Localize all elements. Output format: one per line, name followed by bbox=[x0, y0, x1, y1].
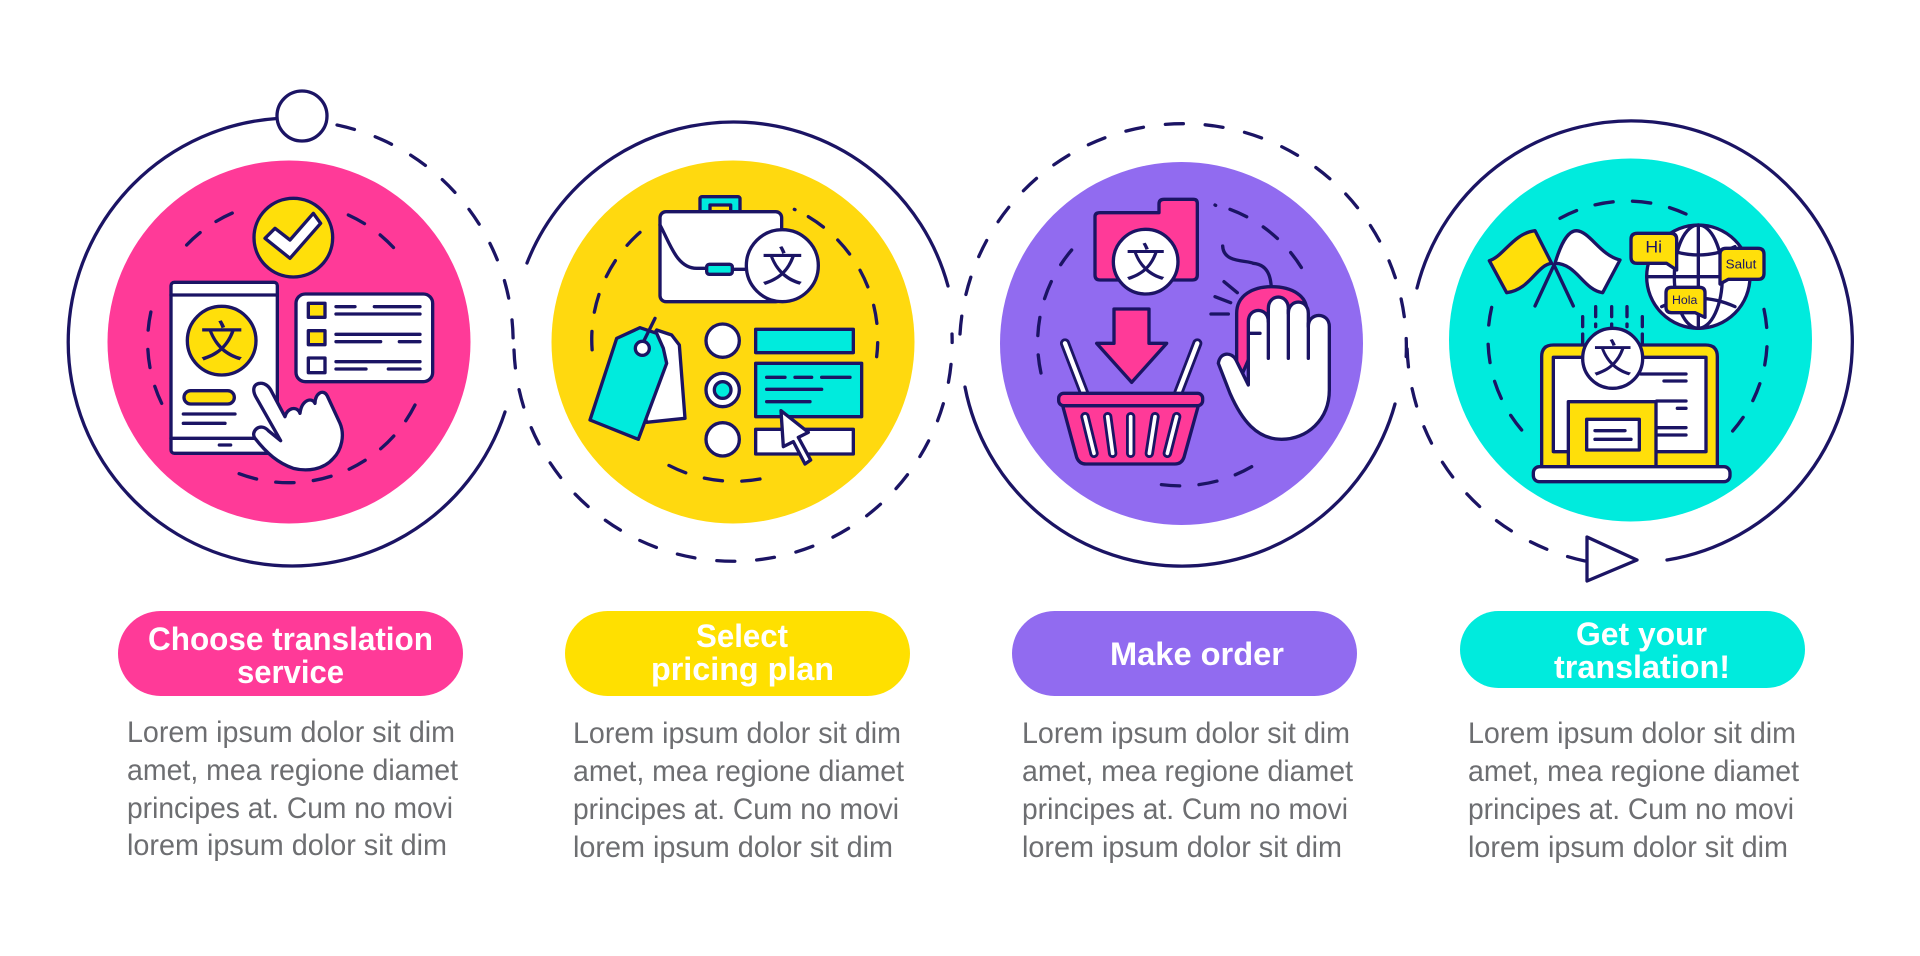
step 1 description: lorem ipsum dolor sit dim bbox=[127, 829, 447, 862]
step 2 description: amet, mea regione diamet bbox=[573, 755, 905, 788]
pill bbox=[565, 611, 910, 696]
step 4 label bbox=[1460, 611, 1805, 688]
icon: translation badge: 文 bbox=[1593, 338, 1632, 382]
icon: translation badge bbox=[1583, 328, 1643, 388]
step 3 description: lorem ipsum dolor sit dim bbox=[1022, 831, 1342, 864]
pill bbox=[118, 611, 463, 696]
flow line: solid arcs bbox=[68, 118, 1852, 566]
step 2 description: Lorem ipsum dolor sit dim bbox=[573, 717, 901, 750]
icon: speech bubble Salut bbox=[1720, 248, 1764, 284]
icon: speech bubble Hola: Hola bbox=[1672, 294, 1698, 307]
panel: step 4 circle and icons bbox=[1449, 158, 1812, 522]
heading: pricing plan bbox=[651, 651, 834, 687]
icon: mouse bbox=[1211, 246, 1307, 387]
teal circle bbox=[1449, 158, 1812, 522]
step 3 description: amet, mea regione diamet bbox=[1022, 755, 1354, 788]
icon: briefcase: 文 bbox=[762, 243, 803, 290]
flow line: dashed connector bbox=[337, 124, 1585, 561]
step 4 description: lorem ipsum dolor sit dim bbox=[1468, 831, 1788, 864]
heading: translation! bbox=[1554, 649, 1730, 685]
icon: speech bubble Salut: Salut bbox=[1726, 257, 1757, 271]
icon: price tags bbox=[590, 318, 685, 439]
heading: Choose translation bbox=[148, 621, 433, 657]
step 2 description: lorem ipsum dolor sit dim bbox=[573, 831, 893, 864]
icon: pricing blocks bbox=[756, 329, 862, 454]
icon: radio options bbox=[706, 324, 739, 456]
icon: briefcase, price tags and pricing options bbox=[590, 197, 878, 481]
pill bbox=[1012, 611, 1357, 696]
heading: Select bbox=[696, 618, 788, 654]
icon: hand bbox=[1218, 297, 1329, 439]
icon: folder, basket and hand on mouse bbox=[1038, 199, 1329, 486]
step 2 description: principes at. Cum no movi bbox=[573, 793, 899, 826]
icon: end arrow bbox=[1587, 537, 1637, 581]
icon: crossed flags bbox=[1489, 231, 1620, 306]
icon: speech bubble Hi bbox=[1631, 233, 1677, 270]
heading: Make order bbox=[1110, 636, 1284, 672]
step 3 description: principes at. Cum no movi bbox=[1022, 793, 1348, 826]
heading: service bbox=[237, 654, 344, 690]
icon: folder: 文 bbox=[1126, 242, 1166, 286]
icon: phone bbox=[171, 282, 277, 453]
pink circle bbox=[108, 160, 470, 524]
panel: step 1 circle and icons bbox=[108, 160, 470, 524]
icon: pointing hand bbox=[254, 383, 342, 470]
step 3 label bbox=[1012, 611, 1357, 696]
step 4 description: principes at. Cum no movi bbox=[1468, 793, 1794, 826]
icon: globe bbox=[1647, 225, 1750, 328]
icon: cursor bbox=[781, 411, 811, 464]
icon: basket bbox=[1059, 343, 1203, 464]
icon: speech bubble Hi: Hi bbox=[1645, 238, 1662, 257]
panel: step 2 circle and icons bbox=[552, 160, 914, 524]
icon: folder bbox=[1095, 199, 1197, 294]
icon: speech bubble Hola bbox=[1666, 287, 1705, 317]
icon: laptop bbox=[1533, 307, 1730, 482]
step 1 label bbox=[118, 611, 463, 696]
pill bbox=[1460, 611, 1805, 688]
step 3 description: Lorem ipsum dolor sit dim bbox=[1022, 717, 1350, 750]
icon: flags, globe and laptop bbox=[1488, 201, 1767, 482]
purple circle bbox=[1000, 162, 1363, 525]
icon: checklist card bbox=[296, 294, 433, 382]
step 1 description: Lorem ipsum dolor sit dim bbox=[127, 716, 455, 749]
panel: step 3 circle and icons bbox=[1000, 162, 1363, 525]
yellow circle bbox=[552, 160, 914, 524]
icon: down arrow bbox=[1097, 309, 1167, 382]
icon: start circle bbox=[277, 91, 327, 141]
icon: briefcase bbox=[660, 197, 818, 302]
step 4 description: Lorem ipsum dolor sit dim bbox=[1468, 717, 1796, 750]
step 1 description: amet, mea regione diamet bbox=[127, 754, 459, 787]
step 1 description: principes at. Cum no movi bbox=[127, 792, 453, 825]
heading: Get your bbox=[1576, 616, 1707, 652]
step 4 description: amet, mea regione diamet bbox=[1468, 755, 1800, 788]
icon: phone, checklist and hand bbox=[148, 198, 433, 483]
step 2 label bbox=[565, 611, 910, 696]
icon: check badge bbox=[254, 198, 333, 277]
icon: phone: 文 bbox=[200, 319, 243, 367]
